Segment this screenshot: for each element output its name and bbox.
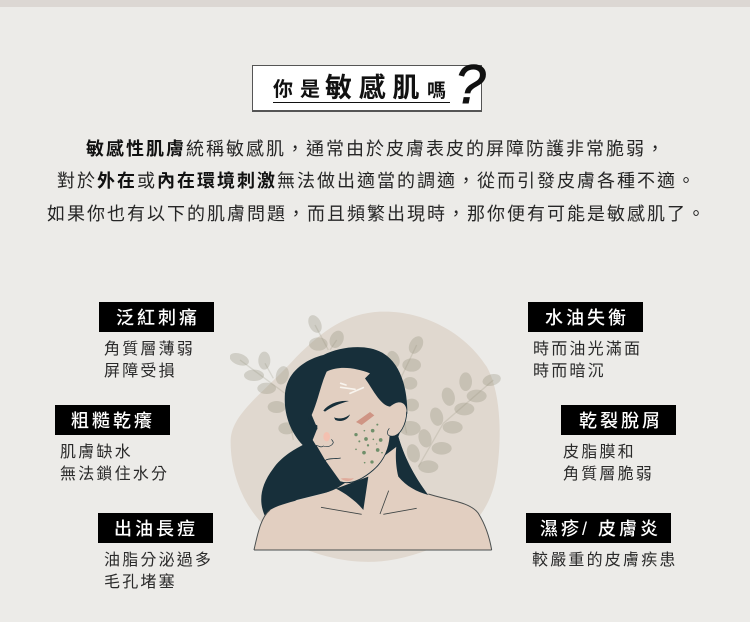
closed eye left <box>308 417 317 429</box>
description <box>563 444 654 483</box>
description: 油脂分泌過多 <box>104 552 213 569</box>
description: 時而油光滿面 <box>533 341 642 358</box>
neck shadow <box>336 477 368 510</box>
face outline <box>316 412 407 483</box>
redness scar <box>356 412 374 425</box>
description: 屏障受損 <box>104 363 177 380</box>
description: 角質層薄弱 <box>104 341 195 358</box>
label <box>526 513 671 543</box>
description <box>60 443 169 483</box>
chin mark <box>341 478 354 481</box>
collarbone lines <box>321 491 417 514</box>
face <box>312 368 407 483</box>
description: 較嚴重的皮膚疾患 <box>532 552 678 569</box>
label <box>528 302 643 332</box>
symptom: 出油長痘 <box>98 513 213 591</box>
eyebrow <box>323 401 349 412</box>
title box <box>252 65 482 112</box>
shoulders and neck <box>254 447 492 550</box>
label: 水油失衡 <box>545 308 629 328</box>
symptom: 粗糙乾癢 <box>55 405 170 483</box>
label: 乾裂脫屑 <box>579 411 663 431</box>
description <box>533 340 642 380</box>
symptom: 濕疹/皮膚炎 <box>526 513 678 569</box>
ear line <box>387 428 390 436</box>
label: 泛紅刺痛 <box>116 308 200 328</box>
label <box>561 405 676 435</box>
label <box>55 405 170 435</box>
mouth <box>325 458 341 461</box>
description <box>104 551 213 591</box>
top band <box>0 0 750 7</box>
description: 肌膚缺水 <box>60 444 133 461</box>
description: 角質層脆弱 <box>563 466 654 483</box>
title text small right: 嗎 <box>427 81 446 102</box>
symptom: 水油失衡 <box>528 302 643 380</box>
symptom: 乾裂脫屑 <box>561 405 676 483</box>
label: 濕疹/ 皮膚炎 <box>540 519 661 539</box>
title text small left: 你是 <box>273 79 327 101</box>
intro line 2: 對於外在或內在環境刺激無法做出適當的調適，從而引發皮膚各種不適。 <box>57 171 697 191</box>
nose <box>316 439 333 447</box>
description: 毛孔堵塞 <box>104 574 177 591</box>
label <box>98 513 213 543</box>
closed eye right <box>334 414 350 421</box>
nose blush <box>323 432 330 441</box>
intro line 1: 敏感性肌膚統稱敏感肌，通常由於皮膚表皮的屏障防護非常脆弱， <box>86 139 666 159</box>
title <box>252 53 486 115</box>
hair strand right <box>396 437 428 495</box>
intro paragraph <box>47 139 707 224</box>
label <box>99 302 214 332</box>
body outline <box>254 494 492 550</box>
hair back <box>261 347 428 518</box>
description: 皮脂膜和 <box>563 444 636 461</box>
description: 時而暗沉 <box>533 363 606 380</box>
description: 無法鎖住水分 <box>60 466 169 483</box>
leaves <box>228 313 502 473</box>
background blob <box>231 312 500 562</box>
title underline <box>273 102 450 103</box>
acne spots <box>354 424 383 464</box>
forehead wrinkles <box>341 383 363 393</box>
description <box>104 340 195 380</box>
title text large: 敏感肌 <box>325 73 426 103</box>
illustration: woman with sensitive skin <box>230 312 501 562</box>
intro line 3: 如果你也有以下的肌膚問題，而且頻繁出現時，那你便有可能是敏感肌了。 <box>47 204 707 224</box>
label: 出油長痘 <box>114 519 198 539</box>
label: 粗糙乾癢 <box>71 411 155 431</box>
symptom: 泛紅刺痛 <box>99 302 214 380</box>
question mark: ? <box>455 53 486 115</box>
